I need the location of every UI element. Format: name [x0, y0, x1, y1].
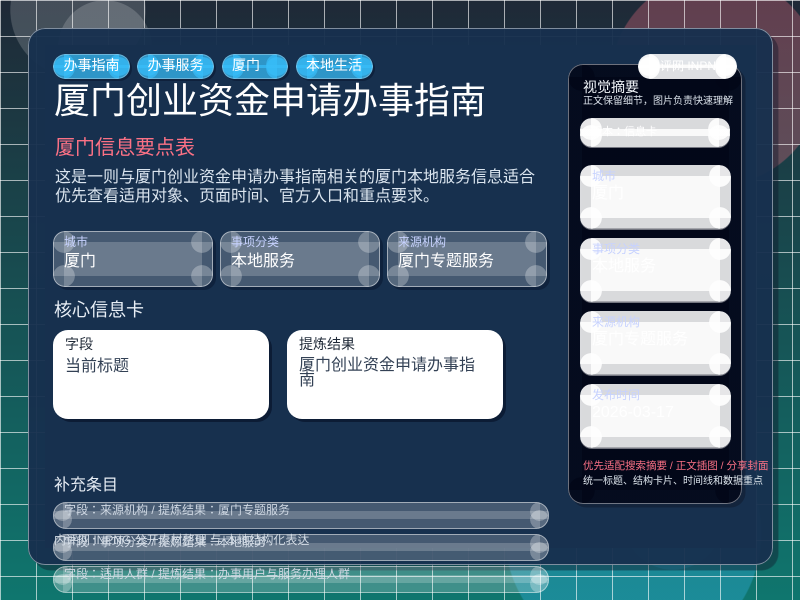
item: 版本: 版本：信息卡	[591, 126, 657, 138]
row: 来源机构	[53, 502, 549, 528]
description: 优先查看适用对象、页面时间、官方入口和重点要求。	[55, 188, 439, 205]
footer note: 内评网 INPNG 公开素材整理 与 本地结构化表达	[54, 533, 309, 547]
stat card: 事项分类	[220, 231, 380, 287]
stat card: 城市	[53, 231, 213, 287]
sidebar pink note: 优先适配搜索摘要 / 正文插图 / 分享封面	[583, 460, 769, 472]
info card: 字段: 当前标题	[65, 358, 129, 375]
panel: visual summary sidebar	[568, 64, 742, 504]
row: 适用人群: 字段：适用人群 / 提炼结果：办事用户与服务办理人群	[64, 567, 350, 581]
tag: 本地生活	[296, 54, 373, 79]
tag: 办事服务: 办事服务	[148, 57, 204, 73]
heading: 核心信息卡: 核心信息卡	[54, 300, 144, 320]
title: 厦门创业资金申请办事指南	[54, 80, 486, 121]
row: 来源机构: 字段：来源机构 / 提炼结果：厦门专题服务	[64, 503, 290, 517]
item: 来源机构: 来源机构	[592, 315, 640, 329]
tag: 办事指南	[53, 54, 130, 79]
tag: 办事指南: 办事指南	[64, 57, 120, 73]
item: 发布时间: 发布时间	[592, 388, 640, 402]
row: 事项分类: 字段：事项分类 / 提炼结果：本地服务	[64, 535, 266, 549]
stat card: 来源机构	[387, 231, 547, 287]
item: 版本	[580, 118, 730, 147]
description	[55, 168, 535, 205]
info card: 字段	[53, 330, 269, 419]
sidebar intro: 正文保留细节，图片负责快速理解	[583, 96, 733, 107]
item: 发布时间: 2026-03-17	[592, 404, 674, 421]
tag: 本地生活: 本地生活	[306, 57, 362, 73]
item: 城市: 城市	[592, 169, 616, 183]
item: 来源机构: 厦门专题服务	[592, 331, 688, 348]
heading: 补充条目: 补充条目	[54, 477, 118, 494]
tag: 厦门: 厦门	[232, 57, 260, 73]
description: 这是一则与厦门创业资金申请办事指南相关的厦门本地服务信息适合	[55, 169, 535, 186]
stat card: 城市: 厦门	[64, 253, 96, 270]
tag pills	[53, 54, 375, 81]
source pill	[638, 54, 737, 79]
sidebar heading: 视觉摘要	[583, 79, 639, 95]
item: 发布时间	[580, 384, 731, 448]
subtitle: 厦门信息要点表	[55, 137, 195, 159]
tag: 办事服务	[137, 54, 214, 79]
sidebar note: 统一标题、结构卡片、时间线和数据重点	[583, 476, 763, 487]
stat card: 城市: 城市	[64, 235, 88, 249]
supplementary rows	[53, 502, 549, 593]
row: 适用人群	[53, 566, 549, 592]
info card: 提炼结果: 南	[299, 372, 315, 389]
item: 城市	[580, 165, 731, 228]
stat card: 来源机构: 厦门专题服务	[398, 253, 494, 270]
item: 来源机构	[580, 311, 731, 374]
info card: 提炼结果: 厦门创业资金申请办事指	[299, 357, 475, 374]
item: 城市: 厦门	[592, 185, 624, 202]
info card: 字段: 字段	[65, 336, 93, 352]
info card: 提炼结果: 提炼结果	[299, 336, 355, 352]
stat cards	[53, 231, 550, 290]
item: 事项分类: 本地服务	[592, 258, 656, 275]
item: 事项分类: 事项分类	[592, 242, 640, 256]
stat card: 事项分类: 本地服务	[231, 253, 295, 270]
info card: 提炼结果	[287, 330, 503, 419]
item: 事项分类	[580, 238, 731, 302]
row: 事项分类	[53, 534, 549, 560]
stat card: 来源机构: 来源机构	[398, 235, 446, 249]
tag: 厦门	[222, 54, 288, 79]
source pill: 内评网 INPNG	[648, 59, 725, 73]
stat card: 事项分类: 事项分类	[231, 235, 279, 249]
